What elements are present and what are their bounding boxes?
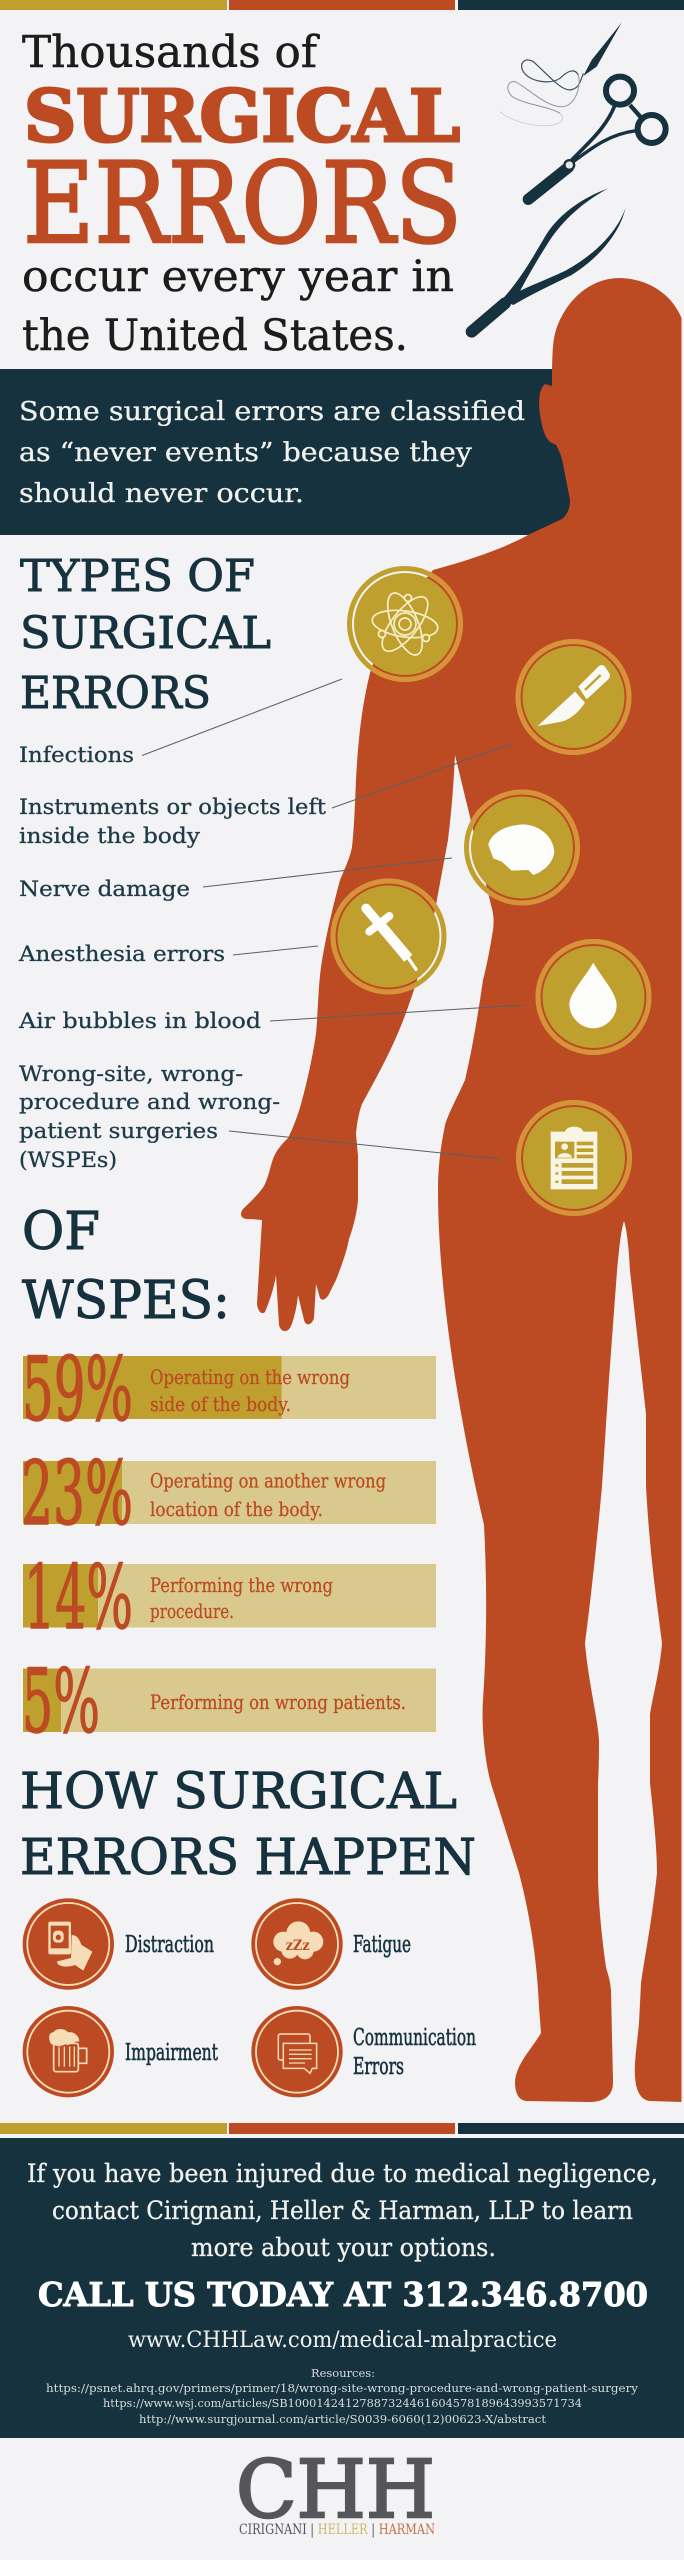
- list: types of errors: procedure and wrong-: [19, 1090, 280, 1114]
- stat: 5%: [22, 1650, 436, 1753]
- list: types of errors: Nerve damage: [19, 877, 190, 901]
- label: distraction: Distraction: [125, 1932, 214, 1958]
- call to action text: If you have been injured due to medical negligence,: [27, 2159, 658, 2188]
- stat: 59%: Operating on the wrong: [150, 1365, 350, 1389]
- stat: 5%: Performing on wrong patients.: [150, 1690, 406, 1714]
- icon: surgical tools: [472, 23, 666, 332]
- phone number: CALL US TODAY AT 312.346.8700: [38, 2275, 648, 2314]
- panel: never events: should never occur.: [19, 479, 304, 509]
- resources: https://www.wsj.com/articles/SB10001424127887324461604578189643993571734: [103, 2396, 582, 2410]
- panel: never events: Some surgical errors are classified: [19, 397, 525, 427]
- panel: call to action: [0, 2138, 684, 2438]
- panel: never events: [0, 369, 575, 535]
- icon: scalpel: [518, 642, 629, 752]
- panel: never events: as “never events” because they: [19, 438, 472, 468]
- icon: communication chat: [251, 2006, 343, 2097]
- stat: 23%: location of the body.: [150, 1497, 323, 1521]
- list: types of errors: [18, 743, 327, 1172]
- logo: CHH: CHH: [236, 2443, 435, 2536]
- heading: types of surgical errors: ERRORS: [20, 668, 211, 719]
- icon: blood drop: [538, 942, 649, 1052]
- title: [22, 27, 462, 361]
- website: www.CHHLaw.com/medical-malpractice: [128, 2328, 557, 2353]
- call to action text: contact Cirignani, Heller & Harman, LLP to learn: [52, 2196, 633, 2225]
- list: types of errors: Wrong-site, wrong-: [19, 1062, 243, 1086]
- icon: brain: [466, 792, 578, 903]
- resources: [46, 2366, 639, 2426]
- list: types of errors: Infections: [19, 743, 134, 767]
- resources: http://www.surgjournal.com/article/S0039-6060(12)00623-X/abstract: [139, 2412, 546, 2426]
- title: the United States.: [22, 311, 408, 361]
- icon: infections atom: [350, 568, 460, 680]
- icon: needle and thread: [500, 23, 622, 126]
- icon: impairment beer mug: [23, 2006, 114, 2097]
- resources: Resources:: [311, 2366, 375, 2380]
- stat: 14%: 14%: [24, 1546, 133, 1649]
- stat: 5%: 5%: [22, 1650, 100, 1753]
- heading: of wspes: OF: [22, 1202, 100, 1262]
- top colour bar: [0, 0, 684, 10]
- icon: forceps: [472, 188, 626, 332]
- heading: types of surgical errors: [20, 551, 271, 719]
- icon: clipboard: [518, 1102, 630, 1214]
- list: types of errors: Instruments or objects left: [19, 795, 327, 819]
- stat: 14%: [23, 1546, 436, 1649]
- icon: scissors clamp: [528, 77, 666, 199]
- stat: 59%: 59%: [22, 1338, 133, 1441]
- label: fatigue: Fatigue: [353, 1932, 411, 1958]
- title: SURGICAL: [24, 74, 460, 158]
- list: types of errors: patient surgeries: [19, 1119, 218, 1143]
- title: ERRORS: [23, 140, 462, 269]
- body silhouette: [241, 278, 682, 2102]
- list: types of errors: inside the body: [19, 824, 200, 848]
- list: types of errors: (WSPEs): [19, 1148, 117, 1172]
- heading: of wspes: WSPES:: [22, 1271, 230, 1331]
- label: communication errors: Errors: [353, 2054, 404, 2080]
- stat: 14%: Performing the wrong: [150, 1573, 333, 1597]
- logo: CHH: CIRIGNANI | HELLER | HARMAN: [239, 2522, 435, 2538]
- list: types of errors: Anesthesia errors: [18, 942, 225, 966]
- heading: how surgical errors happen: [20, 1762, 476, 1886]
- heading: types of surgical errors: SURGICAL: [20, 608, 271, 659]
- icon: dropper: [333, 881, 444, 992]
- label: impairment: Impairment: [125, 2040, 219, 2066]
- stat: 59%: side of the body.: [150, 1392, 291, 1416]
- resources: https://psnet.ahrq.gov/primers/primer/18/wrong-site-wrong-procedure-and-wrong-patient-surgery: [46, 2381, 639, 2395]
- stat: 59%: [22, 1338, 436, 1441]
- call to action text: more about your options.: [191, 2233, 496, 2262]
- title: occur every year in: [22, 252, 454, 302]
- icon: fatigue thought bubble: zZz: [286, 1938, 310, 1954]
- title: Thousands of: [22, 27, 320, 78]
- icon: fatigue thought bubble: [251, 1898, 343, 1990]
- call to action text: [27, 2159, 658, 2262]
- leader lines: [142, 679, 525, 1159]
- list: types of errors: Air bubbles in blood: [18, 1009, 261, 1033]
- heading: of wspes: [22, 1202, 230, 1331]
- bottom colour bar: [0, 2123, 684, 2134]
- stat: 14%: procedure.: [150, 1599, 234, 1623]
- heading: types of surgical errors: TYPES OF: [20, 551, 255, 602]
- heading: how surgical errors happen: HOW SURGICAL: [20, 1762, 457, 1820]
- stat: 23%: Operating on another wrong: [150, 1468, 386, 1492]
- stat: 23%: [21, 1442, 436, 1545]
- heading: how surgical errors happen: ERRORS HAPPEN: [20, 1828, 476, 1886]
- icon: distraction phone: [23, 1898, 114, 1990]
- stat: 23%: 23%: [21, 1442, 133, 1545]
- label: communication errors: Communication: [353, 2025, 476, 2051]
- label: communication errors: [353, 2025, 476, 2080]
